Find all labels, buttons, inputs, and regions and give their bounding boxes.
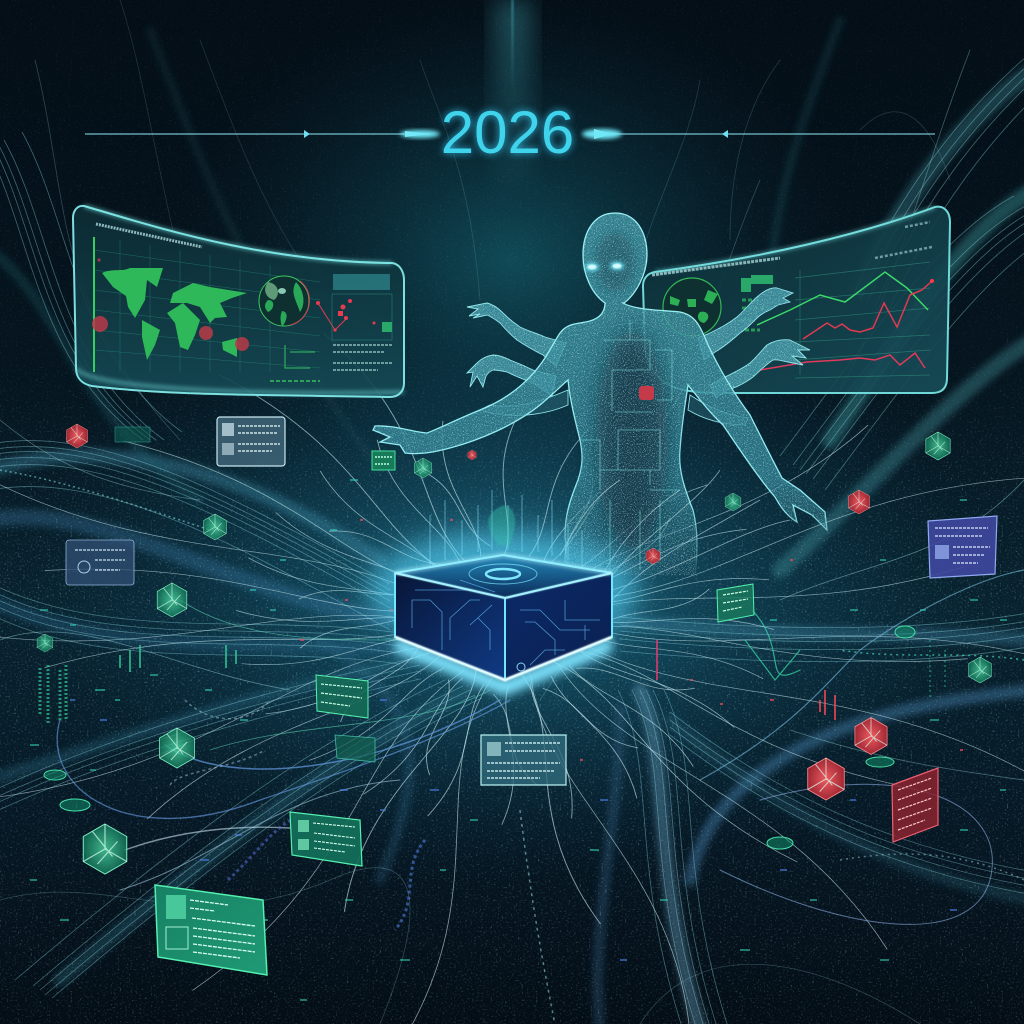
chest circuit traces <box>580 320 680 570</box>
card: dim left <box>66 540 134 585</box>
dashed data streams <box>0 410 1024 1024</box>
red core chip <box>639 386 654 400</box>
left face circuitry <box>412 580 495 650</box>
card: tiny green near hand <box>372 451 395 470</box>
cube edges <box>395 555 612 680</box>
red network line <box>318 303 347 330</box>
map grid <box>94 240 320 372</box>
card: red right <box>892 768 938 842</box>
body particle texture <box>370 210 830 580</box>
card: medium green <box>290 812 362 866</box>
card: pale center below cube <box>481 735 566 785</box>
radial burst of filaments around the cube <box>0 329 1024 1024</box>
card: large green <box>155 885 267 975</box>
top rings <box>469 564 537 584</box>
holographic panel: analytics charts <box>643 207 950 393</box>
side readout <box>270 274 392 381</box>
central glowing cube <box>395 555 612 696</box>
small globe <box>663 278 721 336</box>
small data dashes <box>30 480 1007 1000</box>
holographic panel: world map dashboard <box>73 206 404 397</box>
timeline bar <box>80 129 940 139</box>
panel header text lines <box>96 224 202 247</box>
chart grid <box>795 262 930 378</box>
title: year: 2026 <box>441 99 574 166</box>
eye glow <box>585 262 624 271</box>
card: small green right of cube <box>717 584 754 622</box>
glow rising above cube <box>368 490 638 648</box>
line chart: green <box>757 272 928 325</box>
hexagon nodes: green <box>37 432 991 874</box>
threat markers <box>92 258 249 351</box>
card: pale upper left <box>217 417 285 466</box>
line chart: red lower <box>760 353 925 370</box>
hexagon nodes: red <box>67 424 887 800</box>
world map <box>102 268 247 360</box>
panel header text lines <box>652 258 780 275</box>
figure: rear arms <box>467 288 810 425</box>
small platform discs <box>44 626 915 849</box>
globe <box>259 276 309 327</box>
right face circuitry <box>520 600 600 665</box>
line chart: red <box>803 281 932 339</box>
card: purple right <box>928 516 997 578</box>
figure: translucent humanoid AI body <box>370 210 830 580</box>
eyes <box>588 264 622 270</box>
card: green upper left of cube <box>316 675 368 718</box>
filaments crossing the lower body <box>560 470 790 600</box>
head face shading <box>595 232 635 292</box>
card: faint green lower <box>115 427 375 762</box>
torso dark core <box>596 330 668 550</box>
